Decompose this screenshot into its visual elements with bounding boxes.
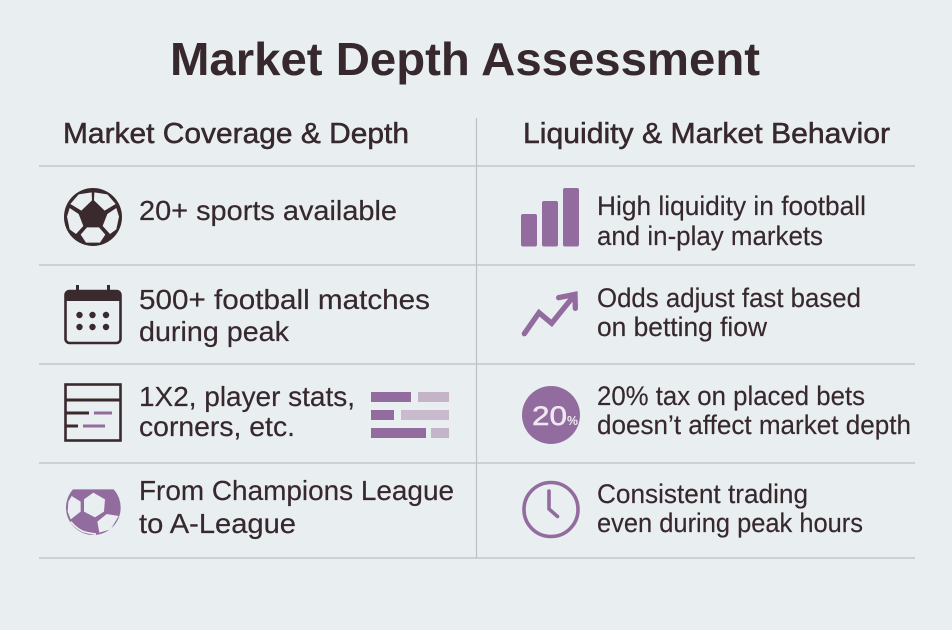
text: consistent trading: Consistent trading <box>597 479 808 509</box>
text: football matches: 500+ football matches <box>139 284 430 315</box>
text: during peak: during peak <box>139 316 290 347</box>
text: tax on placed bets: 20% tax on placed bets <box>597 381 865 411</box>
icon: 20% badge <box>522 386 580 444</box>
text: a-league: to A-League <box>139 508 296 539</box>
column heading: market coverage: Market Coverage & Depth <box>63 118 409 150</box>
text: high liquidity: High liquidity in football <box>597 191 866 221</box>
text: market depth: doesn’t affect market depth <box>597 410 911 440</box>
icon: table <box>65 384 121 440</box>
icon: trend arrow <box>524 294 575 334</box>
text: peak hours: even during peak hours <box>597 508 863 538</box>
text: sports: 20+ sports available <box>139 195 397 226</box>
icon: soccer ball <box>64 188 122 246</box>
text: champions league: From Champions League <box>139 475 454 506</box>
icon: 20% badge: 20 <box>532 401 567 431</box>
icon: 20% badge: % <box>567 413 578 428</box>
text: corners: corners, etc. <box>139 411 295 442</box>
text: 1X2 player stats: 1X2, player stats, <box>139 381 355 412</box>
text: betting flow: on betting fiow <box>597 312 768 342</box>
icon: purple soccer ball <box>66 489 121 535</box>
title: Market Depth Assessment <box>170 33 760 85</box>
text: odds adjust: Odds adjust fast based <box>597 283 861 313</box>
text: in-play markets: and in-play markets <box>597 221 823 251</box>
icon: calendar <box>65 285 121 343</box>
column heading: liquidity: Liquidity & Market Behavior <box>523 118 890 150</box>
icon: clock <box>524 482 578 536</box>
icon: bar chart <box>521 188 579 246</box>
icon: market bars <box>371 392 449 438</box>
